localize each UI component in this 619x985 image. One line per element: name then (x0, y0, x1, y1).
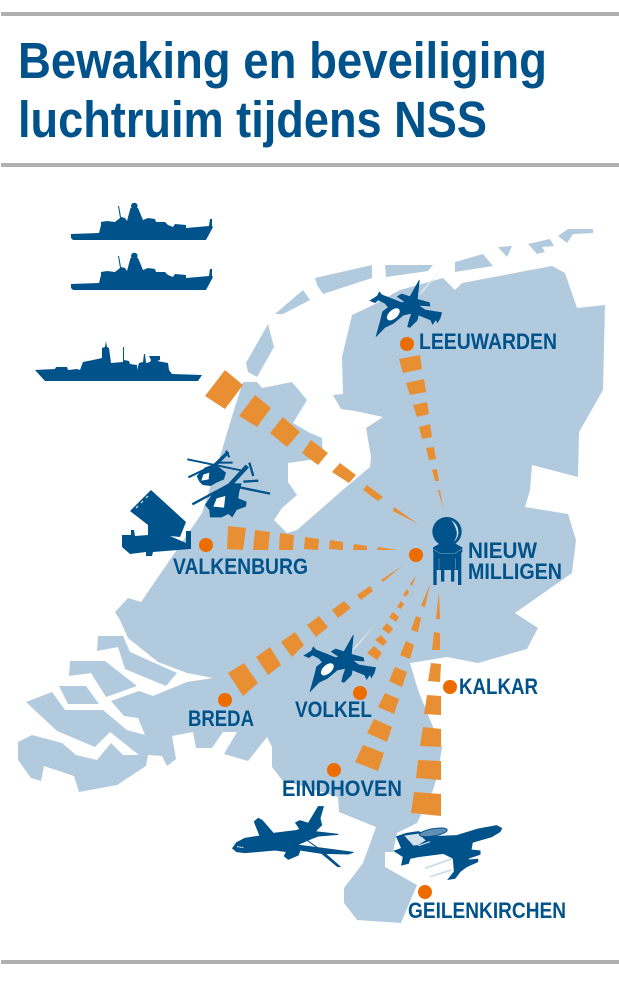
icon: ship 3 (35, 341, 202, 381)
line: Valkenburg (227, 526, 398, 550)
label: Leeuwarden: LEEUWARDEN (419, 329, 557, 354)
island: Texel (246, 324, 274, 377)
label: Eindhoven: EINDHOVEN (282, 776, 402, 801)
label: Nieuw Milligen (468, 538, 562, 584)
helicopter rear (187, 451, 241, 486)
icon: AWACS aircraft (394, 826, 502, 879)
island: Rottumeroog (528, 239, 554, 254)
label: Nieuw Milligen: MILLIGEN (468, 559, 562, 584)
island: Vlieland (275, 290, 310, 314)
dashed lines to Nieuw Milligen (205, 355, 443, 816)
island: Noord-Beveland (59, 686, 99, 704)
island: Schiermonnikoog (455, 254, 493, 272)
line: Geilenkirchen (411, 592, 441, 816)
island: Borkum side (558, 229, 593, 243)
icon: F-16 Leeuwarden (370, 267, 443, 337)
title: luchtruim tijdens NSS (18, 91, 487, 148)
line: Volkel (367, 576, 416, 660)
label: Kalkar: KALKAR (459, 674, 538, 699)
icon: ship 2 (71, 253, 213, 290)
title (18, 32, 547, 148)
label: Nieuw Milligen: NIEUW (468, 538, 537, 563)
line: Leeuwarden (399, 355, 443, 508)
line: ships (205, 370, 418, 524)
icon: helicopters (187, 451, 270, 517)
icon: radar dome (432, 517, 462, 585)
icon: F-16 Volkel (304, 622, 377, 692)
icon: ship 1 (71, 203, 213, 240)
island: Terschelling (315, 265, 372, 294)
label: Breda: BREDA (188, 706, 254, 731)
line: Eindhoven (355, 584, 430, 771)
line: Breda (228, 566, 402, 696)
label: Volkel: VOLKEL (295, 697, 372, 722)
location dots (199, 337, 457, 899)
island: small sandbank (498, 246, 512, 257)
label: Geilenkirchen: GEILENKIRCHEN (408, 898, 566, 923)
island: Ameland (385, 265, 433, 277)
helicopter front (192, 463, 270, 517)
mainland (18, 266, 605, 923)
icon: radar (122, 490, 191, 556)
map of the Netherlands (18, 229, 605, 923)
label: Valkenburg: VALKENBURG (173, 554, 308, 579)
icon: tanker aircraft (233, 807, 353, 867)
island: Schouwen (69, 661, 137, 697)
island: Goeree (97, 636, 177, 686)
title: Bewaking en beveiliging (18, 32, 547, 89)
